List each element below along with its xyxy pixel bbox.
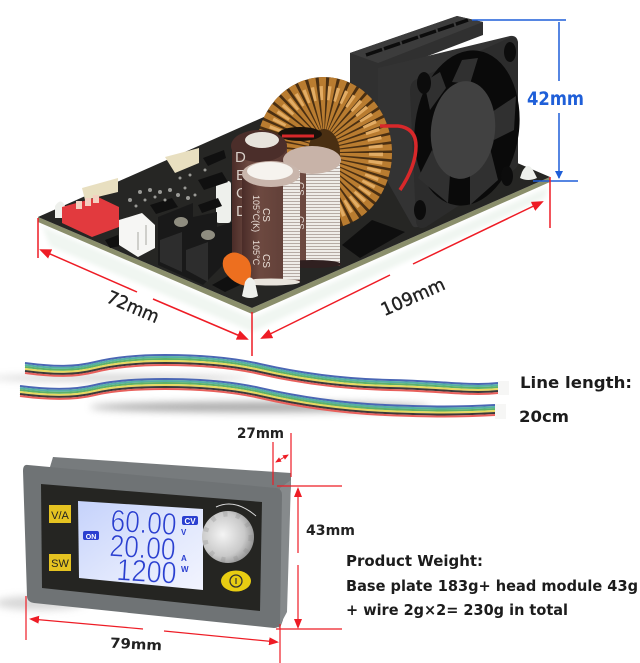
capacitor: front: 105°C(K) — [251, 195, 261, 232]
display module — [0, 457, 291, 628]
mounting holes — [414, 42, 516, 220]
product weight text — [346, 552, 638, 619]
power button — [221, 570, 251, 592]
ribbon cables — [0, 355, 509, 419]
upper ribbon — [25, 355, 498, 394]
housing top and side — [40, 457, 291, 628]
ribbon shadows — [0, 375, 430, 412]
dimension: 27mm: 27mm — [237, 426, 284, 442]
dimension: 27mm — [237, 426, 291, 485]
front standoff — [242, 278, 258, 298]
product weight text: Product Weight: — [346, 552, 483, 570]
lower connector — [495, 404, 506, 419]
toroid coil — [256, 77, 392, 229]
capacitor: front — [242, 161, 300, 286]
dimension: 79mm — [26, 596, 280, 663]
product weight text: + wire 2g×2= 230g in total — [346, 601, 568, 619]
LCD screen: A — [181, 554, 187, 563]
LCD screen: 60.00 — [110, 503, 178, 542]
dimension: 72mm depth — [38, 218, 252, 356]
dimension: 43mm — [276, 486, 355, 629]
dimension: 109mm length — [262, 177, 550, 338]
LCD screen: 20.00 — [109, 528, 177, 567]
heatsink — [350, 16, 483, 110]
circuit board edge — [38, 177, 550, 314]
capacitor: rear: D — [235, 149, 246, 166]
cream connectors — [82, 148, 199, 200]
capacitor: right: CS — [294, 182, 305, 196]
screw terminal — [158, 203, 240, 285]
line length label: Line length: — [520, 373, 632, 392]
upper connector — [498, 381, 509, 395]
board base plate shadow — [42, 187, 548, 332]
red DIP switch — [62, 195, 119, 237]
white connector — [119, 213, 155, 257]
fan hub — [426, 78, 500, 182]
rotary knob — [202, 511, 254, 563]
line length label — [519, 373, 632, 426]
capacitor: front: CS — [260, 208, 271, 222]
SW button: SW — [51, 558, 69, 570]
dial arc — [216, 504, 256, 516]
circuit board top — [38, 85, 550, 308]
lower ribbon — [20, 379, 495, 416]
fan blades — [418, 58, 516, 205]
V/A button: V/A — [51, 510, 70, 522]
capacitor: right: CS — [294, 216, 305, 230]
dimension: 42mm height — [472, 20, 584, 181]
main board assembly — [38, 16, 550, 332]
CV badge: CV — [184, 517, 196, 526]
product weight text: Base plate 183g+ head module 43g — [346, 577, 638, 595]
solder pads — [128, 168, 206, 208]
black panel — [41, 484, 262, 611]
fan wire — [380, 126, 416, 190]
dimension: 79mm: 79mm — [110, 636, 162, 654]
V/A button — [49, 505, 71, 523]
ON badge: ON — [86, 534, 96, 541]
circuit components — [105, 150, 240, 292]
LCD screen: W — [181, 565, 189, 574]
board marking pad — [342, 220, 405, 258]
capacitor: rear — [231, 130, 287, 258]
dimension: 43mm: 43mm — [306, 523, 355, 539]
orange capacitor — [223, 252, 251, 286]
capacitor: front: CS — [260, 254, 271, 268]
fan opening — [405, 44, 529, 212]
LCD screen: 1200 — [116, 552, 178, 591]
dimension: 42mm height: 42mm — [527, 88, 584, 110]
dimension: 109mm length: 109mm — [378, 274, 449, 321]
fan housing — [378, 36, 518, 227]
LCD screen: V — [181, 528, 187, 537]
front bezel — [23, 465, 282, 628]
SW button — [49, 554, 71, 571]
line length label: 20cm — [519, 407, 569, 426]
white standoffs — [55, 166, 537, 223]
dimension: 72mm depth: 72mm — [103, 287, 162, 328]
capacitor: front: 105°C — [251, 240, 261, 266]
LCD screen — [78, 501, 203, 591]
display shadow — [0, 596, 85, 610]
capacitor: rear: D — [236, 203, 247, 220]
capacitor: rear: C — [236, 185, 247, 202]
capacitor: right — [283, 146, 341, 268]
capacitor: rear: E — [236, 167, 246, 184]
cooling fan — [350, 16, 529, 228]
